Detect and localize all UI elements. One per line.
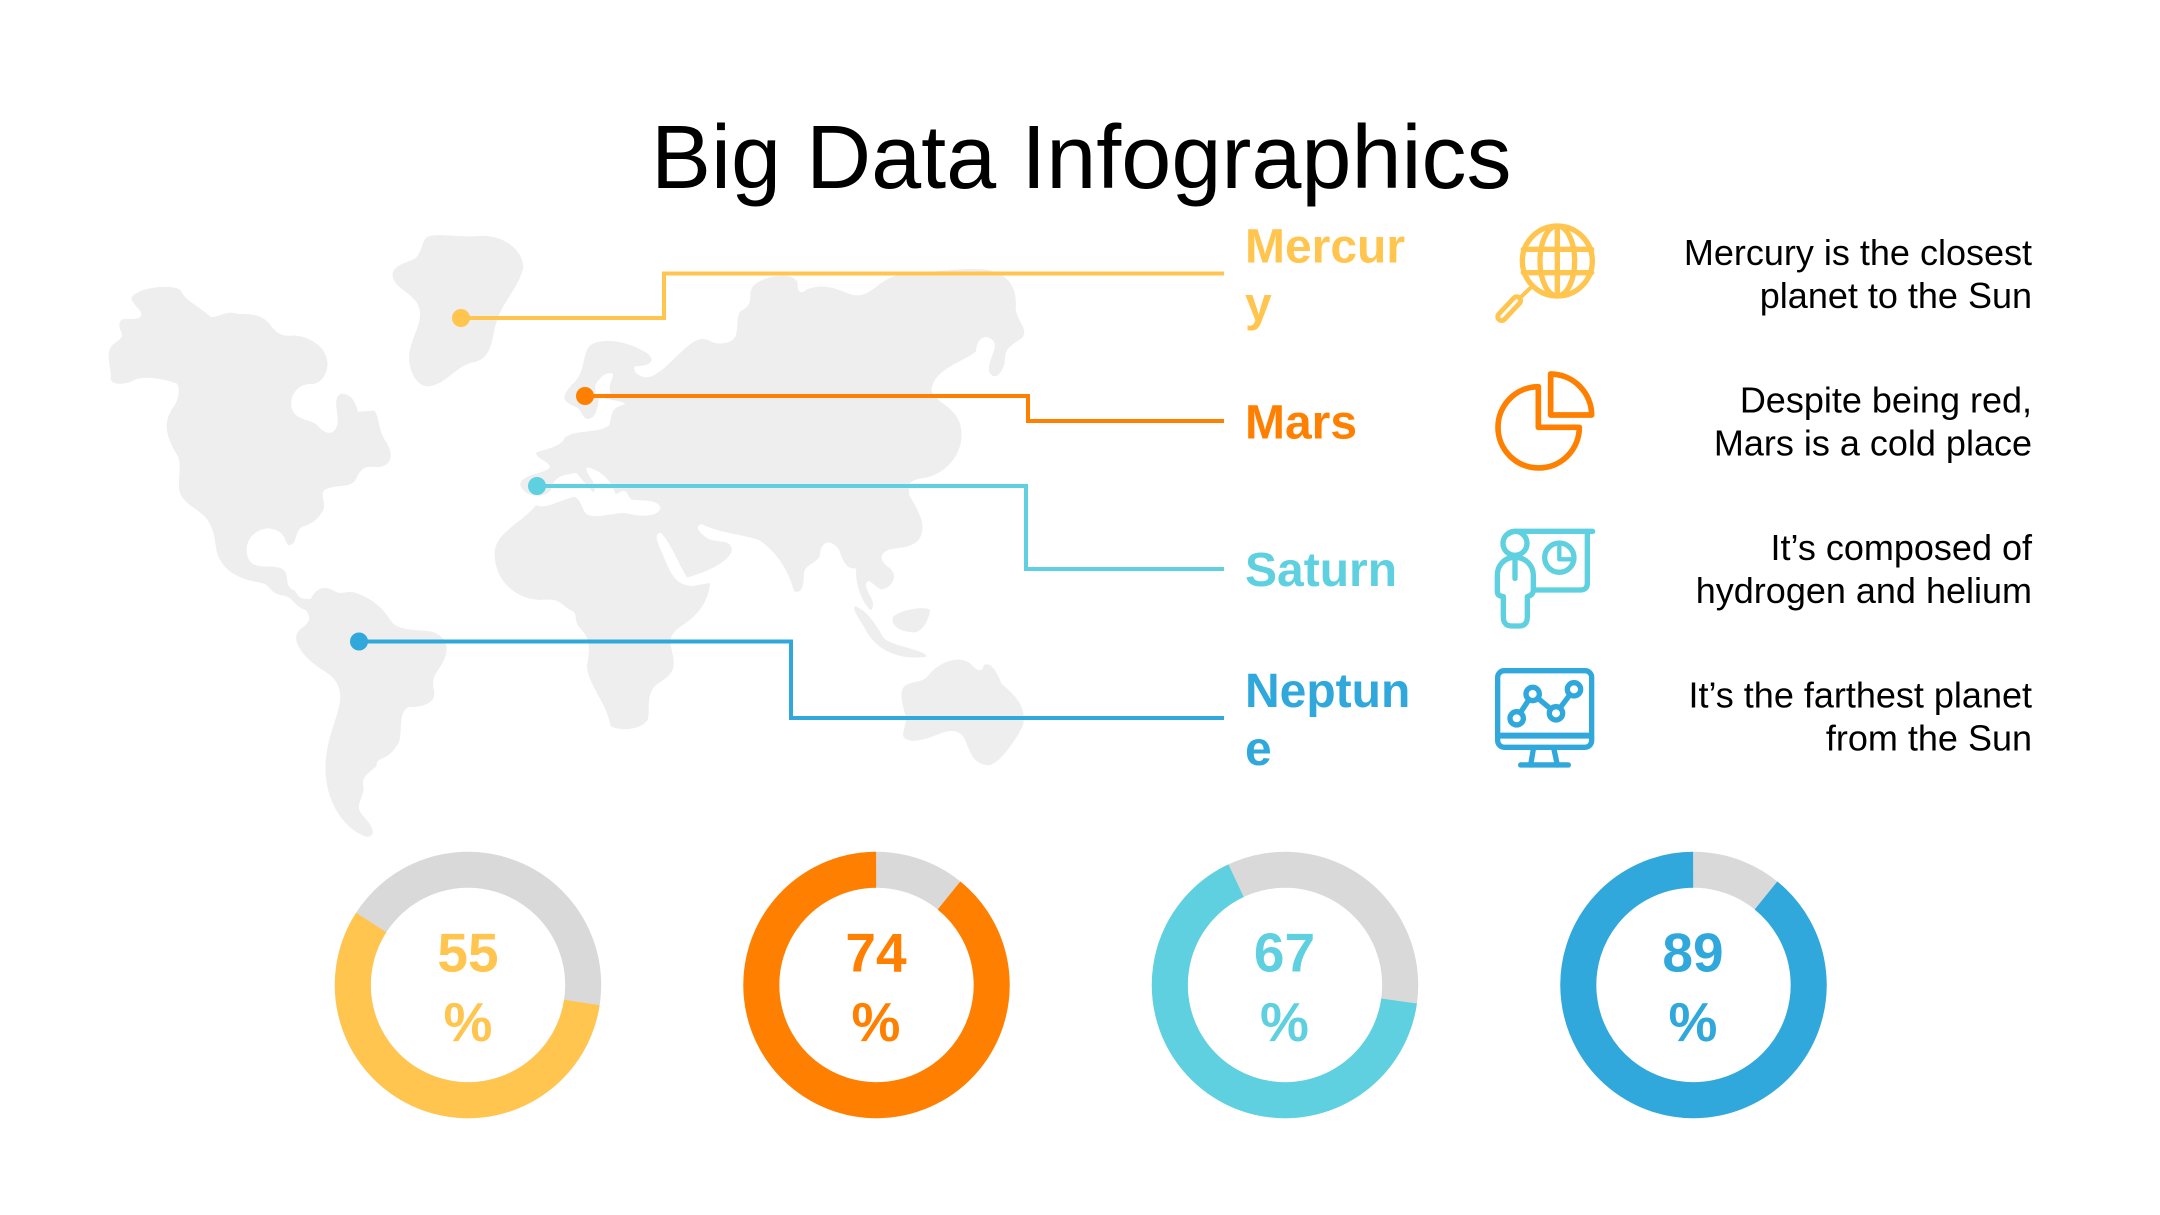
donut: 74%: % (852, 991, 900, 1053)
donut: 74% (714, 823, 1039, 1147)
label: Neptune: Neptun (1245, 665, 1410, 718)
text: Mars description: Despite being red, (1740, 380, 2032, 420)
label: Mars: Mars (1245, 396, 1357, 450)
label: Mercury: Mercur (1245, 220, 1405, 274)
connector: Neptune (350, 632, 1224, 718)
icon: globe magnifier (1502, 226, 1592, 317)
title: Big Data Infographics (651, 108, 1512, 208)
text: Neptune description: from the Sun (1826, 718, 2032, 758)
text: Mercury description: Mercury is the closest (1684, 232, 2032, 273)
donut: 89% (1531, 823, 1856, 1147)
donut: 55%: % (444, 991, 492, 1053)
donut: 67% (1155, 855, 1415, 1115)
donut: 67%: % (1260, 991, 1309, 1053)
text: Mars description: Mars is a cold place (1714, 422, 2032, 464)
text: Mercury description: planet to the Sun (1760, 275, 2032, 316)
text: Saturn description: It’s composed of (1771, 527, 2033, 568)
world map (109, 235, 1024, 837)
icon: presenter with board (1497, 531, 1593, 626)
text: Saturn description: hydrogen and helium (1696, 570, 2032, 611)
donut: 55%: 55 (437, 922, 499, 984)
donut: 67%: 67 (1254, 922, 1315, 984)
label: Saturn: Saturn (1245, 544, 1397, 597)
donut: 89%: 89 (1662, 922, 1724, 984)
label: Neptune: e (1245, 723, 1272, 776)
icon: pie chart (1498, 374, 1592, 468)
connector: Saturn (528, 477, 1224, 569)
donut: 89%: % (1669, 991, 1717, 1053)
label: Mercury: y (1245, 278, 1272, 332)
donut: 74%: 74 (845, 922, 907, 984)
text: Neptune description: It’s the farthest planet (1688, 674, 2032, 716)
donut: 55% (337, 854, 599, 1116)
connector: Mercury (452, 274, 1224, 327)
connector: Mars (576, 387, 1224, 421)
icon: monitor with line chart (1498, 671, 1592, 765)
